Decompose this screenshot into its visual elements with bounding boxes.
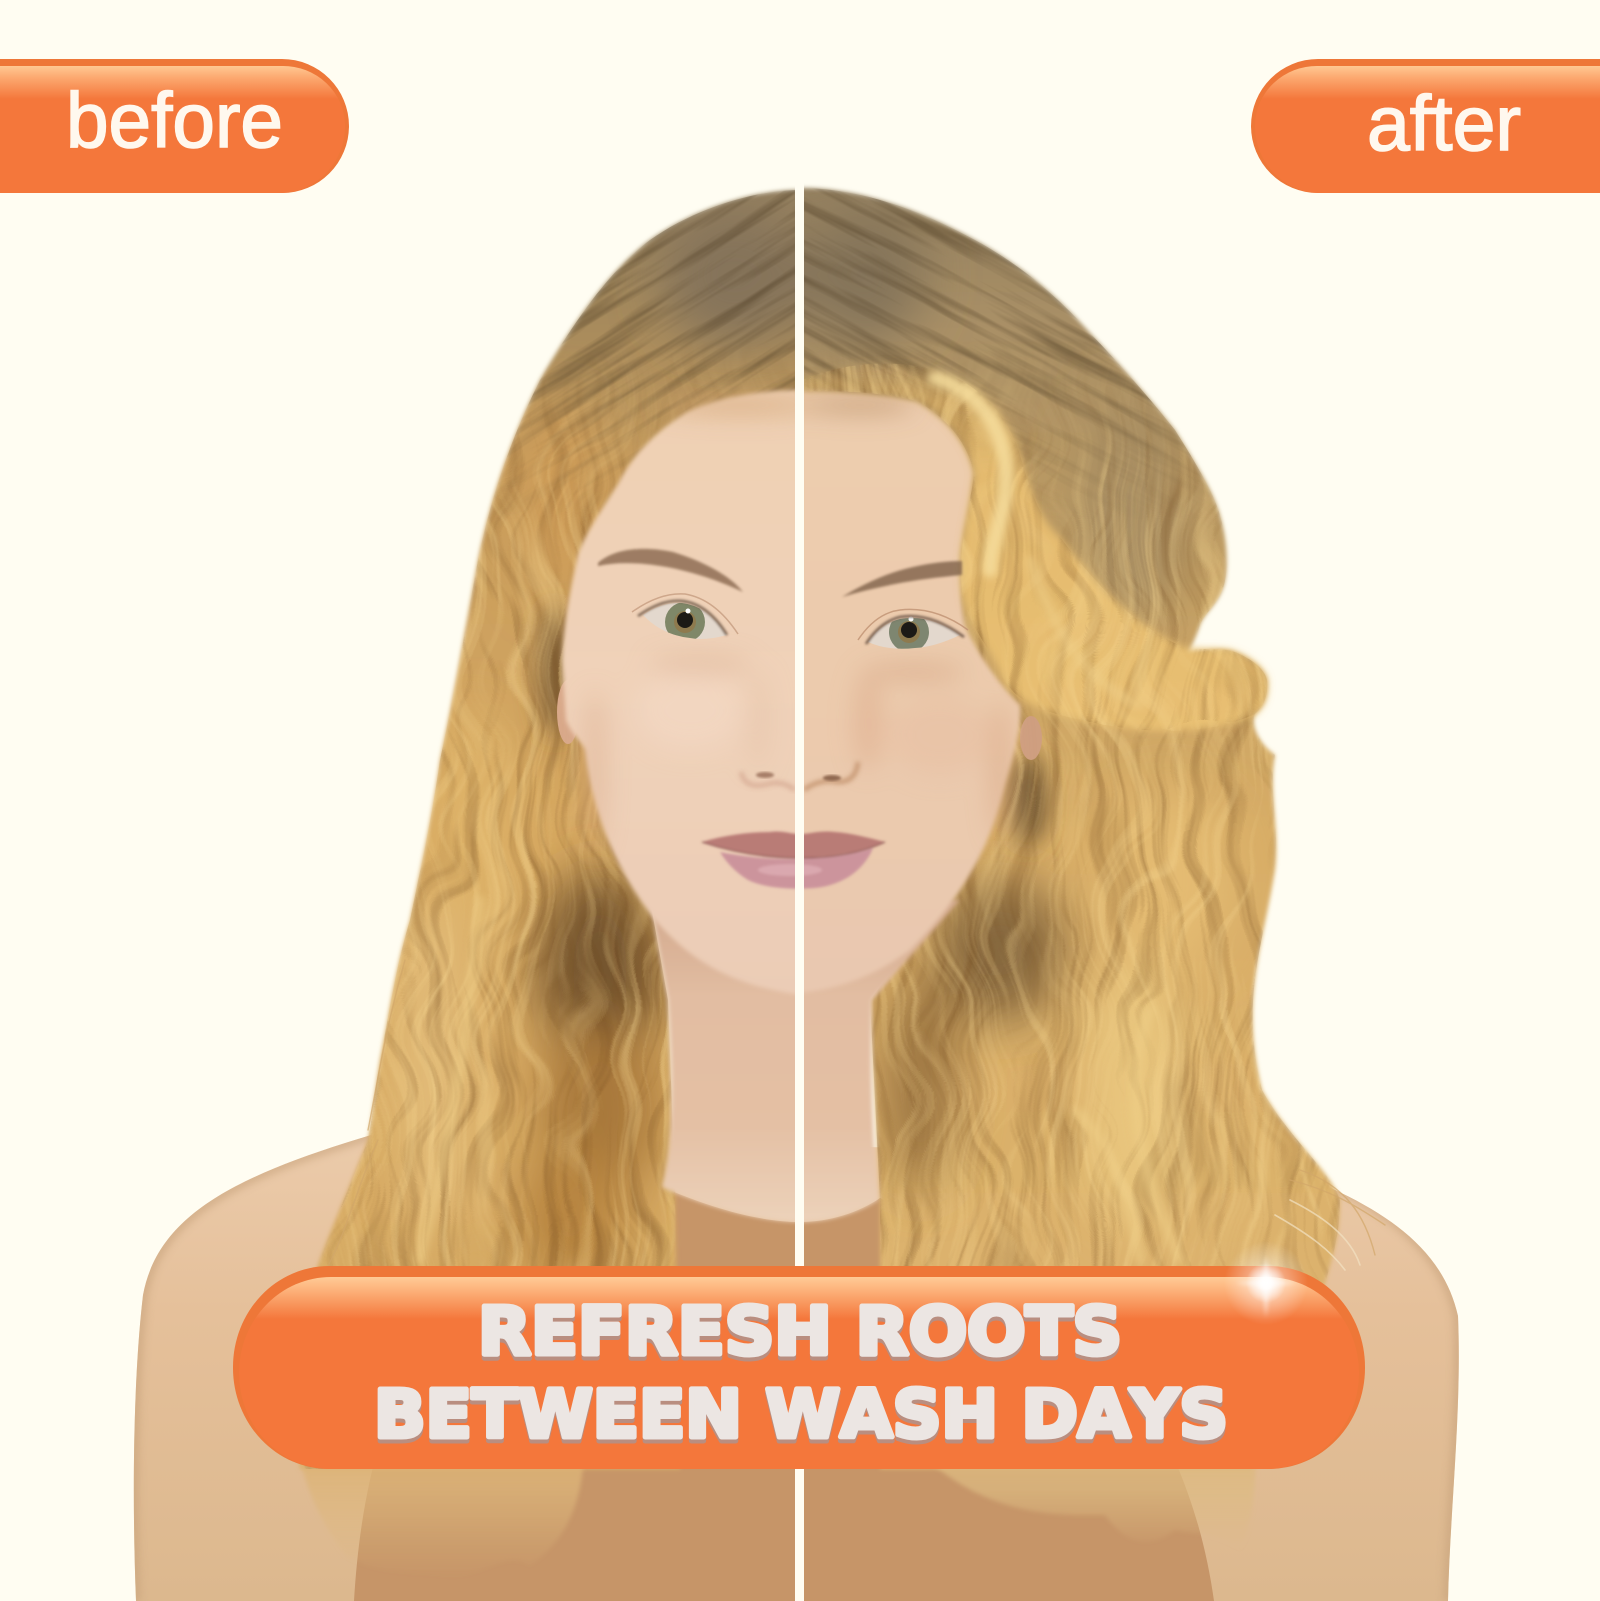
headline text: REFRESH ROOTS — [478, 1297, 1122, 1374]
after label text: after — [1367, 79, 1521, 167]
hair ends below banner — [296, 1440, 1256, 1578]
top garment — [354, 1186, 1214, 1601]
hair strand texture: roots — [508, 188, 1190, 487]
centre divider line — [795, 0, 804, 1601]
headline text: BETWEEN WASH DAYS — [374, 1376, 1228, 1453]
right eyebrow — [842, 561, 962, 597]
hair highlights and strands — [320, 378, 1385, 1280]
right eye — [858, 609, 968, 652]
fine flyaway strands — [320, 960, 1385, 1280]
label pill: after — [1251, 59, 1600, 193]
neck — [650, 900, 960, 1222]
lips — [702, 831, 885, 889]
nose — [741, 762, 858, 790]
portrait: woman split before and after — [134, 185, 1459, 1601]
headline text: BETWEEN WASH DAYS — [374, 1380, 1228, 1457]
face: left half — [562, 390, 800, 995]
before label text: before — [66, 76, 283, 164]
highlight on wave — [935, 378, 1006, 570]
hair: left back mass — [300, 190, 800, 1469]
shoulders and arms — [120, 1120, 1480, 1601]
label pill: before — [0, 59, 349, 193]
headline text — [374, 1293, 1228, 1457]
sparkle on banner — [1224, 1241, 1308, 1325]
hair: right back mass — [800, 188, 1340, 1469]
hair strand texture: lengths — [305, 402, 1340, 1469]
ears — [557, 680, 1042, 760]
headline banner — [233, 1241, 1365, 1469]
right front hair wave — [802, 364, 1267, 731]
wave strand texture — [804, 364, 1265, 730]
face: right half — [800, 390, 1020, 993]
face shading — [585, 396, 1010, 850]
headline text: REFRESH ROOTS — [478, 1293, 1122, 1370]
left eye — [632, 594, 738, 642]
hair shading — [393, 205, 1230, 1290]
left eyebrow — [598, 549, 743, 592]
